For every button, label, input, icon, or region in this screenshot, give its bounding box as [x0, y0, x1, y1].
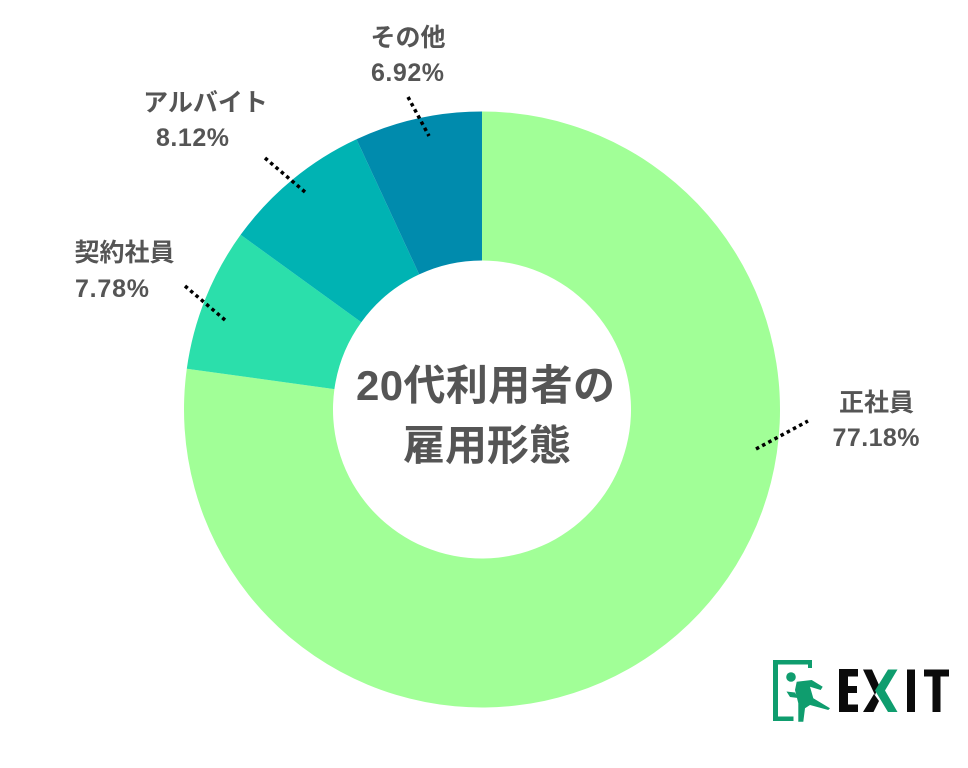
center title: 雇用形態 [403, 422, 571, 469]
leader line: アルバイト [265, 158, 305, 192]
segment: 契約社員 7.78% [187, 235, 361, 389]
label: アルバイト: 8.12% [156, 124, 229, 152]
label: 正社員: 正社員 [839, 389, 914, 417]
logo: EXIT [773, 660, 949, 722]
label: 契約社員 [74, 239, 175, 303]
leader line: 正社員 [756, 421, 808, 449]
donut chart [184, 112, 780, 708]
leader line: 契約社員 [185, 286, 225, 320]
label: 契約社員: 7.78% [75, 275, 149, 303]
segment: アルバイト 8.12% [241, 139, 419, 322]
icon: running figure [786, 672, 830, 722]
label: その他: 6.92% [371, 59, 444, 87]
icon: door frame [773, 660, 812, 721]
label: 正社員 [832, 389, 920, 452]
label: アルバイト [143, 89, 268, 152]
center title [356, 362, 615, 469]
segment: 正社員 77.18% [184, 112, 780, 708]
label: その他 [370, 24, 446, 87]
logo letter X [863, 670, 898, 712]
logo letter T [924, 670, 949, 712]
label: その他: その他 [370, 24, 446, 52]
label: 契約社員: 契約社員 [74, 239, 175, 267]
segment: その他 6.92% [356, 112, 482, 274]
label: 正社員: 77.18% [832, 424, 920, 452]
logo letter E [839, 669, 858, 712]
center title: 20代利用者の [356, 362, 615, 409]
leader line: その他 [408, 97, 429, 136]
logo letter I [907, 670, 915, 712]
label: アルバイト: アルバイト [143, 89, 268, 117]
